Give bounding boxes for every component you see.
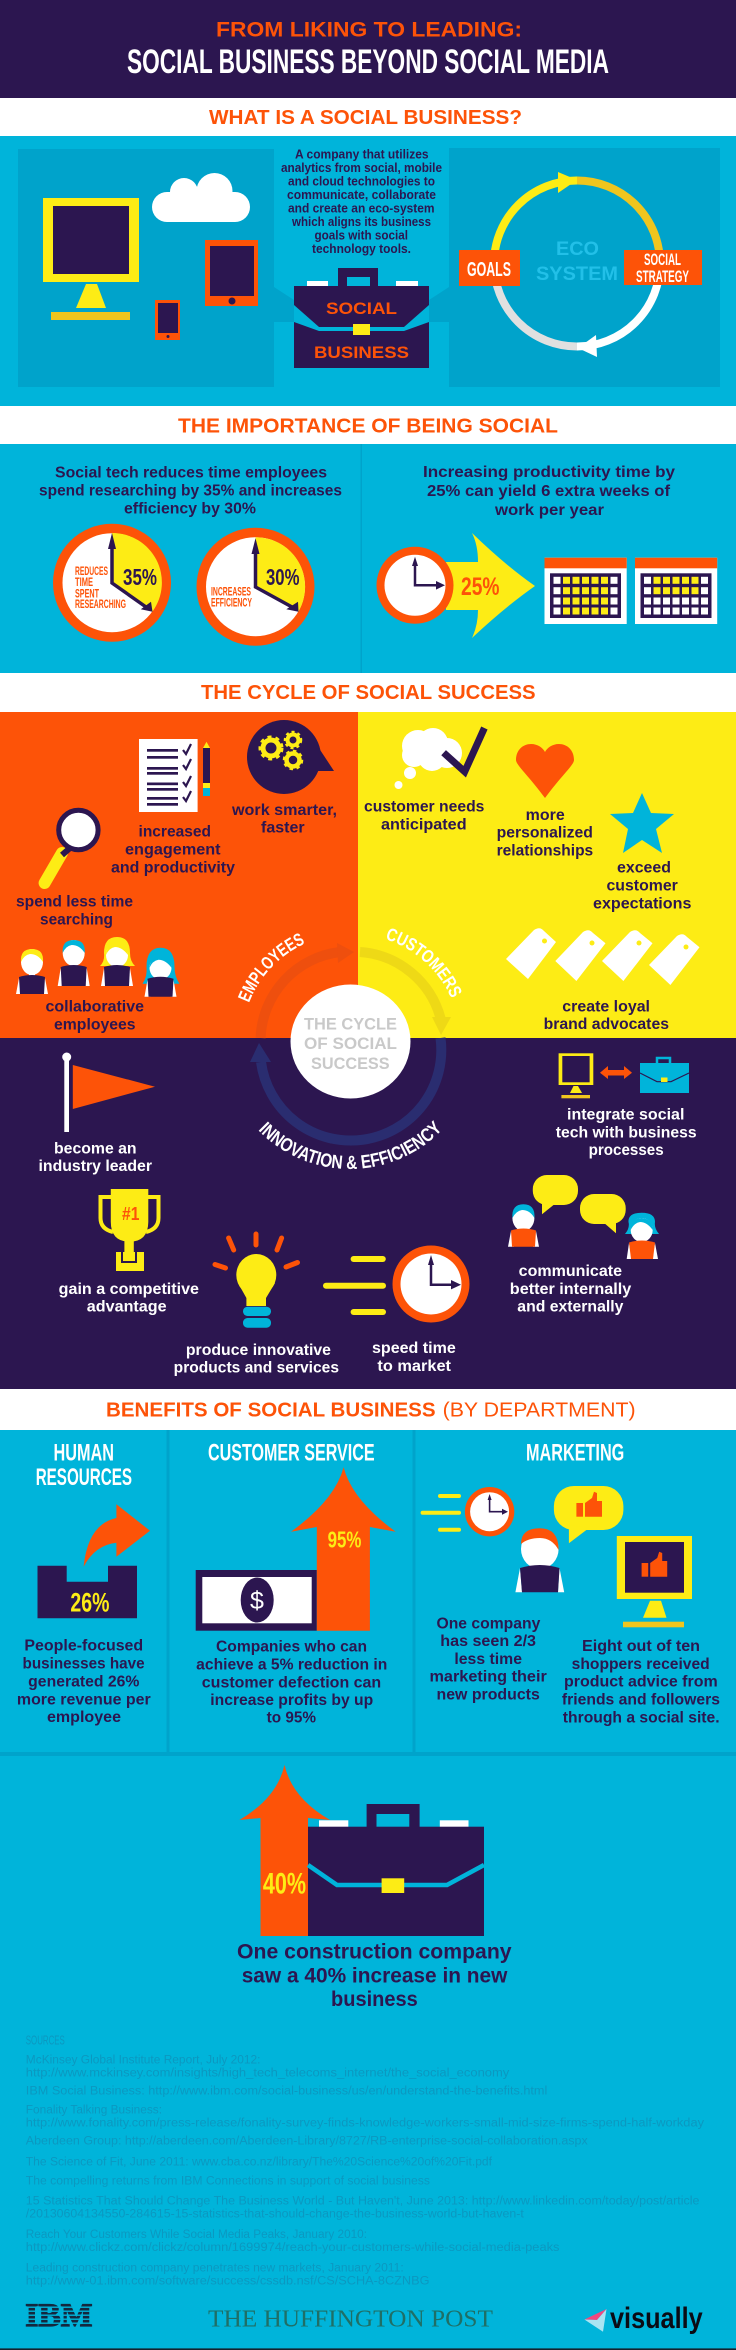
heading: BENEFITS OF SOCIAL BUSINESS xyxy=(106,1400,436,1422)
text: productivity stat: Increasing productivity time by xyxy=(423,464,675,481)
label: eco system: ECO xyxy=(556,238,599,260)
source list: Fonality Talking Business: xyxy=(26,2104,162,2116)
label: social strategy xyxy=(624,250,702,286)
text: marketing stat one: has seen 2/3 xyxy=(440,1633,536,1650)
section: what is a social business xyxy=(0,98,736,387)
text: work smarter xyxy=(231,802,337,837)
text: competitive advantage xyxy=(59,1281,199,1316)
text: collaborative employees xyxy=(46,999,144,1033)
text: marketing stat two: Eight out of ten xyxy=(582,1638,700,1655)
definition text: communicate, collaborate xyxy=(287,188,436,202)
center circle: SUCCESS xyxy=(311,1054,390,1073)
text: marketing stat one: new products xyxy=(436,1686,540,1703)
text: integrate social tech xyxy=(556,1106,697,1159)
text: customer service stat: achieve a 5% reduction in xyxy=(196,1656,387,1673)
heading: marketing: MARKETING xyxy=(526,1440,624,1467)
text: industry leader: become an xyxy=(54,1140,137,1157)
text: spend less time: spend less time xyxy=(16,894,133,911)
section: cycle of social success xyxy=(0,673,736,1389)
definition text: goals with social xyxy=(314,228,408,242)
label: eco system xyxy=(536,238,618,285)
definition text: technology tools. xyxy=(312,242,411,256)
title: from liking to leading: FROM LIKING TO LEADING: xyxy=(216,19,522,42)
person four xyxy=(142,948,180,997)
icon: box with 26 percent: 26% xyxy=(70,1588,109,1618)
heading xyxy=(106,1400,636,1422)
source list: The Science of Fit, June 2011: www.cba.co.nz/library/The%20Science%20of%20Fit.pdf xyxy=(26,2157,493,2169)
icon: four employees xyxy=(16,937,180,997)
text: productivity stat: work per year xyxy=(494,502,604,519)
panel: customers xyxy=(358,712,736,1038)
text: marketing stat one: marketing their xyxy=(430,1669,547,1686)
text: speed to market: speed time xyxy=(372,1340,456,1357)
icon: marketer person xyxy=(515,1528,564,1592)
text: integrate social tech: processes xyxy=(589,1142,664,1159)
panel: human resources xyxy=(17,1440,151,1726)
clock: 30 percent: INCREASES xyxy=(211,587,251,599)
panel: customer service xyxy=(196,1440,396,1727)
sources heading: SOURCES xyxy=(26,2033,65,2048)
text: marketing stat two xyxy=(562,1638,720,1726)
icon: box with 26 percent xyxy=(38,1566,137,1618)
text: needs anticipated xyxy=(364,799,484,833)
text: brand advocates: create loyal xyxy=(562,999,650,1016)
text: construction stat: One construction company xyxy=(237,1941,512,1964)
definition text: analytics from social, mobile xyxy=(281,161,442,175)
text: marketing stat two: product advice from xyxy=(564,1674,718,1691)
heading: THE IMPORTANCE OF BEING SOCIAL xyxy=(178,415,558,437)
center circle xyxy=(290,984,410,1098)
definition text: A company that utilizes xyxy=(295,148,429,162)
text: spend less time: searching xyxy=(40,911,113,928)
text: construction stat: saw a 40% increase in new xyxy=(242,1965,508,1988)
clock: productivity xyxy=(376,547,454,624)
person one xyxy=(16,949,48,994)
icon: monitor thumbs up xyxy=(617,1536,692,1627)
heading: (BY DEPARTMENT) xyxy=(443,1400,636,1422)
text: personalized relationships: more xyxy=(526,807,565,824)
panel: devices xyxy=(18,149,294,387)
icon: briefcase: BUSINESS xyxy=(314,343,409,362)
text: exceed expectations xyxy=(593,860,691,913)
label: social strategy: SOCIAL xyxy=(644,250,681,269)
text: needs anticipated: customer needs xyxy=(364,799,484,816)
clock: 35 percent: REDUCES xyxy=(75,566,108,578)
text: personalized relationships xyxy=(497,807,593,860)
icon: heart xyxy=(516,744,574,798)
text: customer service stat: customer defection can xyxy=(202,1674,381,1691)
center circle: THE CYCLE xyxy=(304,1014,397,1033)
text: personalized relationships: personalized xyxy=(497,825,593,842)
icon: four tags xyxy=(506,928,700,985)
text: marketing stat two: shoppers received xyxy=(572,1656,710,1673)
source list xyxy=(26,2054,704,2287)
text: personalized relationships: relationships xyxy=(497,843,593,860)
panel: eco system xyxy=(429,148,720,387)
icon: light bulb xyxy=(215,1234,298,1328)
clock: 30 percent: EFFICIENCY xyxy=(211,598,252,610)
heading: THE CYCLE OF SOCIAL SUCCESS xyxy=(201,682,536,704)
text: engagement: increased xyxy=(138,824,211,841)
icon: fast clock small xyxy=(421,1487,514,1536)
center circle: OF SOCIAL xyxy=(304,1034,397,1053)
source list: Leading construction company penetrates new markets, January 2011: xyxy=(26,2262,404,2274)
clock: 35 percent: TIME xyxy=(75,577,93,589)
text: research stat: efficiency by 30% xyxy=(124,500,256,517)
icon: checklist xyxy=(139,739,210,812)
source list: The compelling returns from IBM Connections in support of social business xyxy=(26,2175,430,2187)
person two xyxy=(58,940,90,986)
text: work smarter: faster xyxy=(261,820,305,837)
clock: 30 percent xyxy=(196,528,314,646)
text: research stat: Social tech reduces time employees xyxy=(55,464,327,481)
icon: desktop monitor xyxy=(43,198,139,320)
text: construction stat xyxy=(237,1941,512,2011)
text: brand advocates: brand advocates xyxy=(544,1016,669,1033)
icon: monitor to briefcase xyxy=(559,1053,689,1098)
text: innovative products xyxy=(174,1342,339,1377)
source list: Reach Your Customers While Social Media Peaks, January 2010: xyxy=(26,2229,367,2241)
logo: the huffington post: THE HUFFINGTON POST xyxy=(208,2307,493,2333)
source list: Aberdeen Group: http://aberdeen.com/Aberdeen-Library/8727/RB-enterprise-social-collaboration.aspx xyxy=(26,2135,588,2147)
section: importance of being social xyxy=(0,406,736,673)
text: customer service stat: to 95% xyxy=(267,1710,316,1727)
heading: customer service: CUSTOMER SERVICE xyxy=(208,1440,375,1467)
text: hr stat: businesses have xyxy=(22,1655,145,1672)
icon: briefcase: SOCIAL xyxy=(326,299,397,318)
text: innovative products: products and services xyxy=(174,1360,339,1377)
icon: thought cloud with check xyxy=(394,728,484,789)
source list: http://www-01.ibm.com/software/success/cssdb.nsf/CS/SCHA-8CZNBG xyxy=(26,2275,430,2287)
definition text: and cloud technologies to xyxy=(288,174,435,188)
section: construction company stat xyxy=(237,1765,512,2011)
icon: curved arrow xyxy=(84,1504,150,1567)
source list: /20130604134550-284615-15-statistics-that-should-change-the-business-world-but-haven-t xyxy=(26,2208,525,2220)
clock: 35 percent: 35% xyxy=(123,564,157,590)
source list: http://www.fonality.com/press-release/fonality-survey-finds-knowledge-workers-small-mid-size-firms-spend-half-workday xyxy=(26,2118,704,2130)
icon: head with gears xyxy=(247,720,334,794)
logo: visually xyxy=(584,2302,703,2335)
heading: human resources: RESOURCES xyxy=(36,1464,132,1491)
icon: bill: $ xyxy=(250,1587,264,1615)
text: spend less time xyxy=(16,894,133,928)
text: integrate social tech: integrate social xyxy=(567,1106,684,1123)
arrow: 95 percent: 95% xyxy=(328,1526,361,1552)
text: communicate: and externally xyxy=(517,1299,624,1316)
text: competitive advantage: advantage xyxy=(87,1299,167,1316)
icon: tablet xyxy=(205,240,258,306)
icon: briefcase xyxy=(294,268,429,368)
panel: employees xyxy=(0,712,358,1038)
text: engagement: engagement xyxy=(125,841,221,858)
clock: 35 percent: SPENT xyxy=(75,588,99,600)
arrow: 25 percent xyxy=(446,533,535,638)
icon: flag xyxy=(62,1052,155,1132)
text: exceed expectations: exceed xyxy=(617,860,671,877)
label: goals xyxy=(459,250,520,286)
text: speed to market xyxy=(372,1340,456,1375)
text: research stat: spend researching by 35% and increases xyxy=(39,482,342,499)
heading: human resources xyxy=(36,1440,132,1491)
text: communicate: better internally xyxy=(510,1281,632,1298)
icon: trophy xyxy=(100,1189,158,1271)
panel: marketing xyxy=(421,1440,720,1726)
text: marketing stat two: through a social site. xyxy=(563,1709,720,1726)
text: hr stat xyxy=(17,1638,151,1726)
text: work smarter: work smarter, xyxy=(231,802,337,819)
arrow: 40 percent xyxy=(239,1765,330,1936)
icon: speech bubble thumbs up xyxy=(554,1486,623,1543)
source list: McKinsey Global Institute Report, July 2012: xyxy=(26,2054,260,2066)
label: customers: CUSTOMERS xyxy=(387,928,462,997)
source list: 15 Statistics That Should Change The Business World - But Haven't, June 2013: http://www.linkedin.com/today/post/article xyxy=(26,2195,699,2207)
text: marketing stat one: One company xyxy=(436,1615,541,1632)
heading: WHAT IS A SOCIAL BUSINESS? xyxy=(209,107,522,129)
text: hr stat: more revenue per xyxy=(17,1691,151,1708)
person three xyxy=(100,937,135,986)
clock: 30 percent: 30% xyxy=(266,564,300,590)
text: integrate social tech: tech with business xyxy=(556,1124,697,1141)
clock: 35 percent xyxy=(53,524,171,642)
text: customer service stat xyxy=(196,1639,387,1727)
logo: IBM: IBM xyxy=(25,2298,92,2334)
ring arrows xyxy=(494,172,660,357)
text: innovative products: produce innovative xyxy=(186,1342,331,1359)
source list: IBM Social Business: http://www.ibm.com/social-business/us/en/understand-the-benefits.html xyxy=(26,2086,547,2098)
text: competitive advantage: gain a competitive xyxy=(59,1281,199,1298)
text: needs anticipated: anticipated xyxy=(381,816,467,833)
icon: phone xyxy=(155,300,180,340)
text: customer service stat: Companies who can xyxy=(216,1639,367,1656)
icon: calendar two xyxy=(635,558,717,624)
icon: bill xyxy=(196,1570,317,1631)
definition text: and create an eco-system xyxy=(288,202,435,216)
text: engagement: and productivity xyxy=(111,860,235,877)
text: customer service stat: increase profits by up xyxy=(210,1692,373,1709)
label: eco system: SYSTEM xyxy=(536,263,618,285)
text: productivity stat: 25% can yield 6 extra weeks of xyxy=(427,483,671,500)
icon: cloud xyxy=(152,173,250,222)
label: employees: EMPLOYEES xyxy=(238,934,304,1002)
icon: star xyxy=(610,793,674,853)
clock: 35 percent: RESEARCHING xyxy=(75,599,126,611)
text: exceed expectations: customer xyxy=(606,878,678,895)
text: collaborative employees: collaborative xyxy=(46,999,144,1016)
header banner xyxy=(0,0,736,98)
arrow: 25 percent: 25% xyxy=(461,573,500,601)
label: goals: GOALS xyxy=(467,259,511,281)
label: social strategy: STRATEGY xyxy=(636,267,689,286)
text: industry leader: industry leader xyxy=(38,1158,152,1175)
text: industry leader xyxy=(38,1140,152,1175)
label: 40 percent: 40% xyxy=(263,1867,306,1900)
text: productivity stat xyxy=(423,464,675,519)
heading: human resources: HUMAN xyxy=(54,1440,114,1467)
text: exceed expectations: expectations xyxy=(593,896,691,913)
sources xyxy=(26,2033,704,2287)
text: hr stat: employee xyxy=(47,1709,121,1726)
text: marketing stat one xyxy=(430,1615,547,1703)
text: brand advocates xyxy=(544,999,669,1033)
panel: innovation and efficiency xyxy=(0,1038,736,1389)
logo: visually: visually xyxy=(610,2302,703,2335)
icon: trophy: #1 xyxy=(122,1204,139,1224)
text: research stat xyxy=(39,464,342,517)
text: engagement xyxy=(111,824,235,877)
text: communicate xyxy=(510,1263,632,1316)
arrow: 95 percent xyxy=(291,1467,396,1631)
text: speed to market: to market xyxy=(377,1358,451,1375)
source list: http://www.clickz.com/clickz/column/1699974/reach-your-customers-while-social-media-peaks xyxy=(26,2242,560,2254)
icon: large briefcase xyxy=(308,1804,484,1936)
icon: magnifier xyxy=(45,810,98,883)
section: benefits by department xyxy=(0,1389,736,1756)
icon: calendar one xyxy=(544,558,627,624)
text: communicate: communicate xyxy=(519,1263,622,1280)
text: marketing stat two: friends and followers xyxy=(562,1691,720,1708)
icon: fast clock xyxy=(323,1246,470,1322)
text: construction stat: business xyxy=(331,1988,418,2011)
text: marketing stat one: less time xyxy=(454,1651,522,1668)
text: collaborative employees: employees xyxy=(54,1016,136,1033)
cycle ring xyxy=(238,928,462,1170)
icon: two people talking xyxy=(508,1175,659,1259)
definition text xyxy=(281,148,442,256)
source list: http://www.mckinsey.com/insights/high_tech_telecoms_internet/the_social_economy xyxy=(26,2068,510,2080)
definition text: which aligns its business xyxy=(291,215,431,229)
label: innovation and efficiency: INNOVATION & EFFICIENCY xyxy=(258,1120,440,1170)
text: hr stat: generated 26% xyxy=(28,1674,140,1691)
text: hr stat: People-focused xyxy=(24,1638,143,1655)
